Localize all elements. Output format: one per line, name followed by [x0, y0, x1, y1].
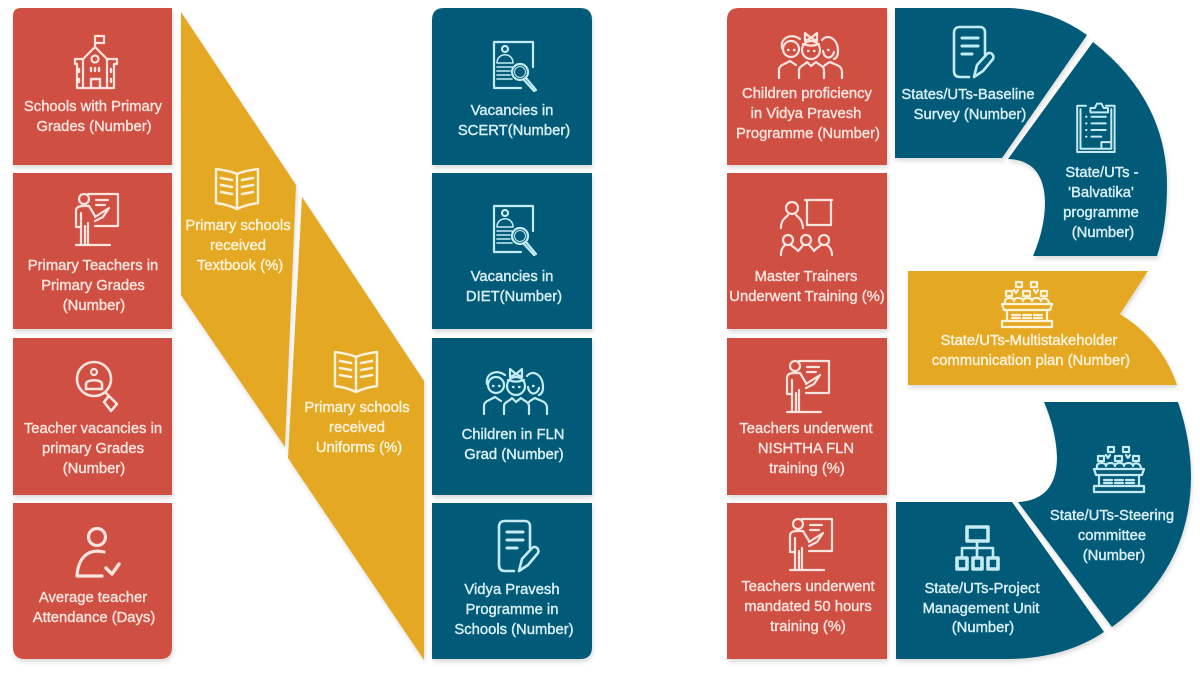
label: master trainers: Master Trainers [755, 269, 857, 285]
segment: steering committee [1018, 402, 1191, 627]
segment: project management unit [896, 502, 1104, 659]
icon: committee [1002, 282, 1052, 327]
label: mandated 50 hours training: mandated 50 hours [744, 599, 872, 615]
icon: document search [494, 42, 536, 91]
label: children in FLN grade: Grad (Number) [464, 447, 564, 463]
letter N: right column of teal cards [432, 8, 592, 659]
label: primary teachers: Primary Grades [41, 278, 145, 294]
label: steering committee: State/UTs-Steering [1050, 508, 1174, 524]
panel: textbooks [181, 12, 296, 447]
label: Vidya Pravesh in schools: Schools (Number) [454, 622, 574, 638]
icon: school building [75, 36, 117, 88]
segment: multistakeholder communication plan [908, 271, 1177, 385]
card: vacancies in DIET [432, 173, 592, 329]
label: children proficiency: in Vidya Pravesh [751, 106, 861, 122]
label: project management unit: (Number) [952, 620, 1014, 636]
label: baseline survey: States/UTs-Baseline [901, 87, 1035, 103]
letter B: teal and yellow segments [895, 8, 1191, 659]
label: teacher vacancies: Teacher vacancies in [24, 421, 162, 437]
icon: trainer and audience [781, 200, 832, 255]
label: primary teachers: Primary Teachers in [28, 258, 158, 274]
icon: three children [484, 369, 547, 414]
label: NISHTHA FLN training: Teachers underwent [739, 421, 873, 437]
label: Balvatika programme: programme [1063, 205, 1139, 221]
label: schools with primary grades: Schools with Primary [24, 99, 163, 115]
icon: three children [779, 33, 842, 78]
label: Balvatika programme: (Number) [1072, 225, 1134, 241]
card: master trainers [727, 173, 887, 329]
segment: Balvatika programme [1008, 42, 1167, 256]
card: Vidya Pravesh in schools [432, 503, 592, 659]
card: mandated 50 hours training [727, 503, 887, 659]
label: uniforms: received [329, 420, 385, 436]
label: children proficiency: Programme (Number) [736, 126, 880, 142]
letter N: yellow diagonal panels [181, 12, 424, 660]
label: uniforms: Uniforms (%) [316, 440, 402, 456]
icon: clipboard [1077, 104, 1115, 152]
card: primary teachers [13, 173, 172, 329]
label: uniforms: Primary schools [304, 400, 410, 416]
label: project management unit: State/UTs-Project [924, 581, 1040, 597]
label: master trainers: Underwent Training (%) [729, 289, 885, 305]
card: vacancies in SCERT [432, 8, 592, 165]
card: children proficiency [727, 8, 887, 165]
card: teacher vacancies [13, 338, 172, 495]
label: primary teachers: (Number) [63, 298, 125, 314]
card: children in FLN grade [432, 338, 592, 495]
label: children in FLN grade: Children in FLN [462, 427, 564, 443]
label: NISHTHA FLN training: NISHTHA FLN [758, 441, 854, 457]
icon: document search [494, 206, 536, 255]
label: textbooks: Textbook (%) [197, 258, 283, 274]
icon: open book [216, 169, 258, 209]
label: average teacher attendance: Average teacher [39, 590, 147, 606]
icon: teacher at board [787, 361, 829, 412]
card: NISHTHA FLN training [727, 338, 887, 495]
label: textbooks: Primary schools [185, 218, 291, 234]
label: Vidya Pravesh in schools: Programme in [466, 602, 558, 618]
label: mandated 50 hours training: training (%) [770, 619, 846, 635]
letter B: red column of cards [727, 8, 887, 659]
label: schools with primary grades: Grades (Number) [36, 119, 152, 135]
icon: user with check [77, 528, 119, 576]
label: textbooks: received [210, 238, 266, 254]
label: baseline survey: Survey (Number) [914, 107, 1026, 123]
icon: committee [1094, 447, 1144, 492]
card: schools with primary grades [13, 8, 172, 165]
panel: uniforms [288, 197, 424, 660]
label: vacancies in SCERT: SCERT(Number) [458, 123, 570, 139]
label: average teacher attendance: Attendance (Days) [33, 610, 155, 626]
icon: teacher at board [76, 194, 118, 245]
icon: document with pencil [499, 521, 538, 571]
label: teacher vacancies: (Number) [63, 461, 125, 477]
label: teacher vacancies: primary Grades [42, 441, 144, 457]
label: Vidya Pravesh in schools: Vidya Pravesh [464, 582, 560, 598]
icon: open book [335, 352, 377, 392]
label: steering committee: (Number) [1083, 548, 1145, 564]
label: vacancies in DIET: DIET(Number) [466, 289, 562, 305]
icon: teacher at board [790, 519, 832, 570]
label: Balvatika programme: State/UTs - [1065, 165, 1139, 181]
label: Balvatika programme: 'Balvatika' [1068, 185, 1134, 201]
label: project management unit: Management Unit [923, 601, 1039, 617]
segment: baseline survey [895, 8, 1087, 158]
icon: document with pencil [954, 27, 993, 77]
label: vacancies in DIET: Vacancies in [471, 269, 553, 285]
label: children proficiency: Children proficiency [742, 86, 873, 102]
card: average teacher attendance [13, 503, 172, 659]
label: vacancies in SCERT: Vacancies in [471, 103, 553, 119]
label: multistakeholder communication plan: communication plan (Number) [932, 353, 1130, 369]
label: NISHTHA FLN training: training (%) [769, 461, 845, 477]
icon: organisation chart [957, 527, 998, 569]
label: steering committee: committee [1078, 528, 1146, 544]
icon: magnifier with person [77, 362, 117, 411]
letter N: left column of red cards [13, 8, 172, 659]
label: multistakeholder communication plan: State/UTs-Multistakeholder [941, 333, 1117, 349]
label: mandated 50 hours training: Teachers underwent [741, 579, 875, 595]
